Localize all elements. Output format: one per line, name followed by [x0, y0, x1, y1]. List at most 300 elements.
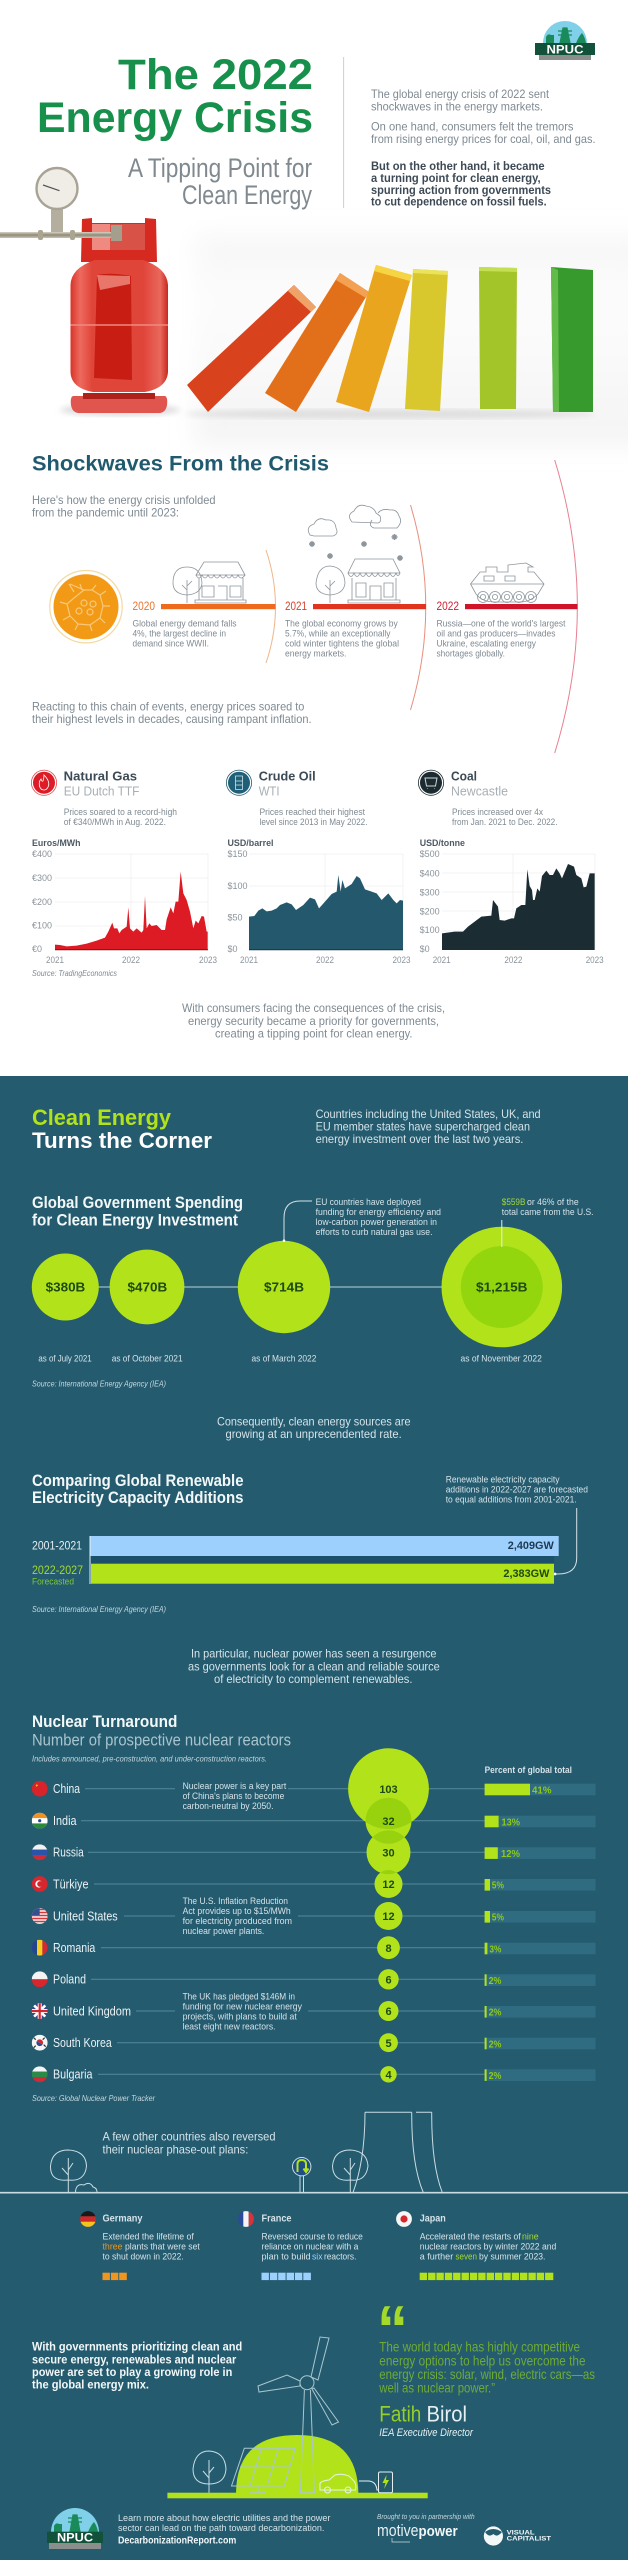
callout: US share: or 46% of the: [527, 1197, 579, 1208]
icon: virus: [50, 570, 122, 643]
quote text: The world today has highly competitive: [379, 2339, 580, 2355]
timeline 2021: cold winter tightens the global: [285, 639, 399, 650]
timeline 2021: energy markets.: [285, 649, 346, 660]
annotation: United Kingdom: projects, with plans to build at: [183, 2011, 297, 2022]
panel: Japan: a further: [420, 2251, 454, 2262]
block lime: [479, 267, 517, 409]
panel: France: France: [262, 2214, 292, 2225]
timeline 2020: Global energy demand falls: [132, 619, 237, 630]
row: Romania: [32, 1940, 596, 1956]
transition text: [182, 1001, 445, 1041]
chart: coal price: $500: [420, 849, 440, 859]
chart: crude oil price: 2021: [240, 955, 258, 965]
logo: motive power: [377, 2521, 458, 2542]
bubbles: prospective reactors: [348, 1748, 429, 2082]
quote block: [377, 2292, 595, 2439]
nuclear intro text: as governments look for a clean and reliable source: [188, 1659, 440, 1673]
panel: Japan: Japan: [420, 2214, 446, 2225]
panel: Japan: by summer 2023.: [479, 2251, 545, 2262]
intro text: The global energy crisis of 2022 sent: [371, 87, 550, 101]
block green: [551, 267, 593, 412]
panel: Germany: [80, 2211, 200, 2280]
callout: EU funding: [283, 1197, 441, 1242]
timeline 2021: The global economy grows by: [285, 619, 398, 630]
callout: capacity forecast: additions in 2022-2027 are forecasted: [446, 1485, 588, 1496]
timeline 2020: demand since WWII.: [132, 639, 209, 650]
logo: NPUC bottom: NPUC: [57, 2533, 93, 2545]
panel: Japan: seven: [456, 2251, 477, 2262]
consequently text: [217, 1415, 411, 1441]
panel: Germany: Extended the lifetime of: [102, 2231, 194, 2242]
chart: crude oil price: [228, 849, 411, 965]
intro bold text: But on the other hand, it became: [371, 159, 545, 173]
callout: capacity forecast: [446, 1475, 588, 1575]
timeline 2022: shortages globally.: [436, 649, 505, 660]
consequently text: growing at an unprecendented rate.: [226, 1427, 402, 1441]
heading: government spending: Global Government Spending: [32, 1194, 243, 1212]
bar: 2022-2027: [91, 1564, 554, 1584]
chart: crude oil price: 2023: [392, 955, 411, 965]
clean energy intro: EU member states have supercharged clean: [316, 1120, 530, 1134]
chart: crude oil price: $0: [228, 944, 238, 954]
panel: coal: Coal: [451, 769, 477, 784]
source: trading economics: Source: TradingEconomics: [32, 968, 118, 978]
illustration: armored vehicle 2022: [470, 563, 544, 602]
heading: nuclear turnaround: Number of prospective nuclear reactors: [32, 1731, 291, 1750]
panel: France: Reversed course to reduce: [262, 2231, 363, 2242]
row: Russia: Russia: [53, 1846, 84, 1860]
bubbles: prospective reactors: 12: [382, 1879, 395, 1891]
timeline 2020: 4%, the largest decline in: [132, 629, 226, 640]
tree left: [50, 2150, 86, 2192]
panel: France: reliance on nuclear with a: [262, 2241, 359, 2252]
chart: coal price: 2023: [586, 955, 604, 965]
row: Russia: 12%: [501, 1848, 521, 1860]
intro bold text: a turning point for clean energy,: [371, 171, 541, 185]
row: United Kingdom: 2%: [489, 2007, 502, 2019]
intro text: from rising energy prices for coal, oil, and gas.: [371, 132, 596, 146]
footer learn more text: [118, 2513, 331, 2546]
conclusion text: secure energy, renewables and nuclear: [32, 2352, 237, 2366]
heading: clean energy: Clean Energy: [32, 1105, 172, 1130]
hill and ground: [236, 2435, 358, 2494]
timeline intro text: [32, 493, 216, 520]
subtitle: A Tipping Point for: [128, 153, 312, 183]
chart: natural gas price: €300: [32, 873, 52, 883]
annotation: China: Nuclear power is a key part: [183, 1781, 287, 1792]
quote attribution: Birol: [426, 2402, 467, 2427]
gas cylinder with gauge: [0, 168, 180, 416]
panel: Japan: nuclear reactors by winter 2022 and: [420, 2241, 556, 2252]
chart: natural gas price: €200: [32, 897, 52, 907]
logo: NPUC top: NPUC: [546, 44, 584, 56]
callout: EU funding: efforts to curb natural gas use.: [316, 1227, 432, 1238]
heading: government spending: for Clean Energy Investment: [32, 1212, 238, 1230]
consequently text: Consequently, clean energy sources are: [217, 1415, 411, 1429]
heading: clean energy: Turns the Corner: [32, 1128, 212, 1153]
panel: coal: Newcastle: [451, 784, 508, 799]
clean energy intro: [316, 1107, 541, 1146]
transition text: With consumers facing the consequences of the crisis,: [182, 1001, 445, 1015]
phase-out intro text: [102, 2130, 276, 2156]
row: United States: United States: [53, 1909, 118, 1923]
row: India: India: [53, 1814, 77, 1828]
row: Türkiye: [32, 1876, 596, 1892]
row: Poland: [32, 1971, 596, 1987]
chart: natural gas price: [32, 849, 217, 965]
timeline 2020: [132, 601, 276, 650]
transition text: energy security became a priority for governments,: [188, 1014, 439, 1028]
bubble: 380B: $380B: [46, 1280, 85, 1294]
wind turbine: [258, 2337, 338, 2493]
intro bold text: [371, 159, 551, 208]
subtitle: [128, 153, 312, 210]
conclusion text: [32, 2340, 242, 2391]
annotation: United States: Act provides up to $15/MWh: [183, 1906, 291, 1917]
footer learn more text: DecarbonizationReport.com: [118, 2535, 236, 2546]
timeline 2022: [436, 601, 578, 660]
row: India: 13%: [502, 1816, 521, 1828]
icon: U-turn sign: [292, 2158, 311, 2192]
heading: renewable capacity: Electricity Capacity Additions: [32, 1489, 244, 1507]
panel: Japan: Accelerated the restarts of: [420, 2231, 521, 2242]
timeline 2022: 2022: [436, 601, 459, 613]
annotation: United Kingdom: [183, 1991, 302, 2032]
timeline arcs: [266, 460, 577, 753]
heading: nuclear turnaround: Nuclear Turnaround: [32, 1713, 177, 1731]
callout: capacity forecast: to equal additions from 2001-2021.: [446, 1495, 577, 1506]
bar labels: 2022-2027: [32, 1565, 83, 1577]
bubbles: prospective reactors: 5: [385, 2038, 392, 2050]
cylinder base: [71, 396, 167, 413]
annotation: United States: [183, 1896, 292, 1937]
footer learn more text: sector can lead on the path toward decarbonization.: [118, 2523, 324, 2534]
snowflakes: [309, 534, 403, 561]
heading: shockwaves: Shockwaves From the Crisis: [32, 452, 329, 476]
transition text: creating a tipping point for clean energy.: [215, 1027, 412, 1041]
row: Romania: Romania: [53, 1941, 95, 1955]
subtitle: Clean Energy: [182, 180, 312, 210]
title block: [37, 51, 313, 142]
row: Türkiye: 5%: [492, 1880, 505, 1892]
block orange: [265, 273, 369, 412]
row: Russia: [32, 1844, 596, 1860]
panel: France: six: [312, 2251, 323, 2262]
intro bold text: to cut dependence on fossil fuels.: [371, 194, 547, 208]
callout: capacity forecast: Renewable electricity capacity: [446, 1475, 560, 1486]
nuclear intro text: [188, 1647, 440, 1686]
panel: Japan: [396, 2211, 556, 2280]
timeline 2022: Russia—one of the world's largest: [436, 619, 566, 630]
clean energy intro: Countries including the United States, UK, and: [316, 1107, 541, 1121]
quote attribution: [379, 2402, 474, 2439]
illustration: clean energy hill: [167, 2337, 428, 2498]
panel: crude oil: Prices reached their highest: [260, 807, 365, 818]
intro text: [371, 87, 596, 146]
panel: natural gas: Euros/MWh: [32, 838, 81, 849]
row: United Kingdom: United Kingdom: [53, 2004, 131, 2018]
panel: Germany: plants that were set: [125, 2241, 200, 2252]
icon: coal cart: [418, 770, 444, 795]
title divider: [343, 57, 345, 208]
ground line: [0, 2192, 628, 2194]
chart: coal price: $100: [420, 925, 440, 935]
row: India: [32, 1813, 596, 1829]
bubbles: prospective reactors: 30: [382, 1847, 395, 1859]
bar labels: Forecasted: [32, 1577, 74, 1588]
panel: coal: from Jan. 2021 to Dec. 2022.: [452, 817, 558, 828]
chart: coal price: $400: [420, 868, 440, 878]
row: Poland: Poland: [53, 1973, 86, 1987]
reacting text: Reacting to this chain of events, energy prices soared to: [32, 700, 305, 714]
timeline 2022: oil and gas producers—invades: [436, 629, 556, 640]
timeline intro text: from the pandemic until 2023:: [32, 506, 179, 520]
date labels: as of March 2022: [252, 1354, 316, 1365]
tree: [193, 2451, 226, 2493]
timeline 2021: 5.7%, while an exceptionally: [285, 629, 391, 640]
row: Romania: 3%: [489, 1943, 502, 1955]
date labels: as of November 2022: [460, 1354, 542, 1365]
panel: natural gas: [31, 769, 217, 965]
phase-out intro text: A few other countries also reversed: [102, 2130, 276, 2144]
partner credit: Brought to you in partnership with: [377, 2512, 475, 2521]
annotation: China: of China's plans to become: [183, 1791, 284, 1802]
bubbles: prospective reactors: 103: [379, 1784, 398, 1796]
bubble: 470B: [110, 1250, 184, 1324]
row: United Kingdom: [32, 2003, 596, 2019]
row: Bulgaria: Bulgaria: [53, 2068, 93, 2082]
chart: natural gas price: €0: [32, 944, 42, 954]
panel: natural gas: of €340/MWh in Aug. 2022.: [64, 817, 166, 828]
panel: crude oil: [226, 769, 411, 965]
panel: coal: [418, 769, 604, 965]
reacting text: [32, 700, 312, 726]
conclusion text: With governments prioritizing clean and: [32, 2340, 242, 2354]
timeline 2020: 2020: [132, 601, 155, 613]
icon: flame: [31, 770, 57, 795]
chart: natural gas price: €100: [32, 920, 52, 930]
chart: crude oil price: $50: [228, 912, 243, 922]
intro bold text: spurring action from governments: [371, 183, 551, 197]
row: China: 41%: [532, 1784, 552, 1796]
bubble: 1215B: $1,215B: [476, 1280, 528, 1294]
bubbles: prospective reactors: 6: [385, 1974, 392, 1986]
chart: coal price: [420, 849, 604, 965]
solar panel: [232, 2448, 295, 2493]
date labels: [38, 1354, 542, 1365]
row: South Korea: [32, 2035, 596, 2051]
annotation: China: [183, 1781, 287, 1812]
row: United States: [32, 1908, 596, 1924]
annotation: United Kingdom: funding for new nuclear energy: [183, 2001, 302, 2012]
logo: visual capitalist: VISUAL: [507, 2530, 535, 2537]
quote attribution: Fatih: [379, 2402, 421, 2427]
chart: coal price: $200: [420, 906, 440, 916]
panel: natural gas: EU Dutch TTF: [64, 784, 139, 799]
date labels: as of July 2021: [38, 1354, 92, 1365]
panel: France: [238, 2211, 363, 2280]
bubble chart: government spending: [32, 1227, 562, 1365]
row: China: China: [53, 1782, 80, 1796]
quote text: [378, 2339, 595, 2396]
bubbles: prospective reactors: 4: [385, 2069, 392, 2081]
clouds: [308, 519, 337, 536]
title block: Energy Crisis: [37, 94, 313, 142]
chart: natural gas price: 2021: [46, 955, 64, 965]
bubble: 380B: [32, 1254, 99, 1320]
quote attribution: IEA Executive Director: [379, 2427, 474, 2439]
reacting text: their highest levels in decades, causing rampant inflation.: [32, 712, 312, 726]
row: United States: 5%: [492, 1912, 505, 1924]
panel: natural gas: Natural Gas: [64, 769, 137, 784]
title block: The 2022: [118, 51, 313, 99]
panel: France: plan to build: [262, 2251, 310, 2262]
panel: coal: Prices increased over 4x: [452, 807, 543, 818]
illustration: shop and tree 2020: [173, 562, 246, 603]
logo: visual capitalist: [484, 2526, 551, 2546]
source: IEA capacity: Source: International Energy Agency (IEA): [32, 1604, 166, 1614]
panel: Germany: to shut down in 2022.: [102, 2251, 184, 2262]
row: Bulgaria: [32, 2066, 596, 2082]
block amber: [336, 265, 412, 412]
intro text: On one hand, consumers felt the tremors: [371, 120, 574, 134]
panel: Japan: nine: [522, 2231, 539, 2242]
date labels: as of October 2021: [112, 1354, 183, 1365]
annotation: United States: The U.S. Inflation Reduction: [183, 1896, 288, 1907]
panel: France: reactors.: [324, 2251, 356, 2262]
chart: natural gas price: 2022: [122, 955, 140, 965]
row: Poland: 2%: [489, 1975, 502, 1987]
clean energy intro: energy investment over the last two years.: [316, 1132, 523, 1146]
quote text: energy options to help us overcome the: [379, 2352, 586, 2368]
chart: coal price: 2022: [504, 955, 522, 965]
callout: EU funding: funding for energy efficiency and: [316, 1207, 441, 1218]
heading: nuclear turnaround: [32, 1713, 291, 1764]
nuclear intro text: In particular, nuclear power has seen a resurgence: [191, 1647, 437, 1661]
electric car and charger: [320, 2472, 392, 2493]
tipping blocks: [185, 265, 595, 419]
cylinder valve guard: [81, 218, 157, 262]
bubbles: prospective reactors: 12: [382, 1911, 395, 1923]
bubbles: prospective reactors: 32: [382, 1816, 395, 1828]
bar labels: [32, 1540, 83, 1588]
illustration: cooling towers, trees, ground: [0, 2112, 628, 2193]
intro text: shockwaves in the energy markets.: [371, 100, 543, 114]
hero backdrop: [195, 235, 628, 445]
callout: US share: [502, 1197, 594, 1247]
logo: NPUC top: [535, 21, 595, 60]
panel: Germany: three: [102, 2241, 122, 2252]
callout: EU funding: EU countries have deployed: [316, 1197, 421, 1208]
heading: renewable capacity: Comparing Global Renewable: [32, 1472, 244, 1490]
logo: NPUC bottom: [47, 2508, 103, 2549]
annotation: United States: nuclear power plants.: [183, 1926, 264, 1937]
block yellow: [405, 269, 448, 411]
panel: coal: USD/tonne: [420, 838, 465, 849]
chart: natural gas price: 2023: [199, 955, 217, 965]
logo: motive power: power: [418, 2523, 458, 2540]
annotation: United Kingdom: least eight new reactors.: [183, 2021, 276, 2032]
footer learn more text: Learn more about how electric utilities and the power: [118, 2513, 331, 2524]
source: IEA spending: Source: International Energy Agency (IEA): [32, 1379, 166, 1389]
chart: coal price: $300: [420, 887, 440, 897]
icon: oil barrel: [226, 770, 252, 795]
row: Bulgaria: 2%: [489, 2070, 502, 2082]
bar chart: capacity additions: [32, 1536, 559, 1588]
bar labels: 2001-2021: [32, 1540, 82, 1552]
row: South Korea: South Korea: [53, 2036, 112, 2050]
panel: natural gas: Prices soared to a record-high: [64, 807, 177, 818]
conclusion text: power are set to play a growing role in: [32, 2365, 232, 2379]
timeline 2022: Ukraine, escalating energy: [436, 639, 536, 650]
annotation: China: carbon-neutral by 2050.: [183, 1801, 274, 1812]
bubble: 714B: [238, 1241, 330, 1333]
callout: US share: total came from the U.S.: [502, 1207, 594, 1218]
callout: US share: $559B: [502, 1197, 525, 1208]
chart: crude oil price: 2022: [316, 955, 334, 965]
conclusion text: the global energy mix.: [32, 2377, 149, 2391]
quote text: well as nuclear power.”: [378, 2380, 495, 2396]
row: China: [32, 1781, 596, 1797]
panel: crude oil: WTI: [259, 784, 280, 799]
tree right: [332, 2150, 368, 2192]
bubbles: prospective reactors: 6: [385, 2006, 392, 2018]
timeline 2021: 2021: [285, 601, 307, 613]
gauge stem: [51, 208, 63, 232]
annotation: United States: for electricity produced from: [183, 1916, 292, 1927]
block red: [187, 285, 316, 412]
bar: 2001-2021: [90, 1536, 559, 1556]
bubbles: prospective reactors: 8: [385, 1943, 392, 1955]
bubble: 714B: $714B: [264, 1280, 304, 1294]
chart: natural gas price: €400: [32, 849, 52, 859]
row: South Korea: 2%: [489, 2038, 502, 2050]
annotation: United Kingdom: The UK has pledged $146M in: [183, 1991, 295, 2002]
phase-out intro text: their nuclear phase-out plans:: [102, 2142, 248, 2156]
callout: EU funding: low-carbon power generation in: [316, 1217, 437, 1228]
heading: renewable capacity: [32, 1472, 244, 1507]
panel: crude oil: level since 2013 in May 2022.: [260, 817, 368, 828]
logo: motive power: motive: [377, 2521, 418, 2540]
chart header: percent of global total: Percent of global total: [485, 1765, 572, 1776]
bubble: 1215B: [442, 1227, 562, 1347]
cylinder body: [70, 260, 168, 392]
pressure gauge: [36, 168, 78, 209]
chart: crude oil price: $150: [228, 849, 248, 859]
source: nuclear tracker: Source: Global Nuclear Power Tracker: [32, 2093, 156, 2103]
nuclear intro text: of electricity to complement renewables.: [214, 1672, 412, 1686]
row: Türkiye: Türkiye: [53, 1877, 89, 1891]
bubble: 470B: $470B: [128, 1280, 167, 1294]
panel: Germany: Germany: [102, 2214, 143, 2225]
panel: crude oil: Crude Oil: [259, 769, 316, 784]
illustration: winter shop 2021: [308, 505, 403, 603]
logo: visual capitalist: CAPITALIST: [507, 2536, 551, 2543]
quote mark: “: [377, 2292, 408, 2366]
chart: crude oil price: $100: [228, 881, 248, 891]
panel: crude oil: USD/barrel: [228, 838, 274, 849]
bar: 2001-2021: 2,409GW: [508, 1540, 554, 1552]
timeline 2021: [285, 601, 426, 660]
chart: coal price: 2021: [433, 955, 451, 965]
heading: clean energy: [32, 1105, 212, 1153]
panel: clean energy background: [0, 1076, 628, 2560]
chart: coal price: $0: [420, 944, 430, 954]
heading: government spending: [32, 1194, 243, 1230]
heading: nuclear turnaround: Includes announced, pre-construction, and under-construction reactors.: [32, 1754, 267, 1764]
bar: 2022-2027: 2,383GW: [503, 1568, 550, 1580]
timeline intro text: Here's how the energy crisis unfolded: [32, 493, 216, 507]
